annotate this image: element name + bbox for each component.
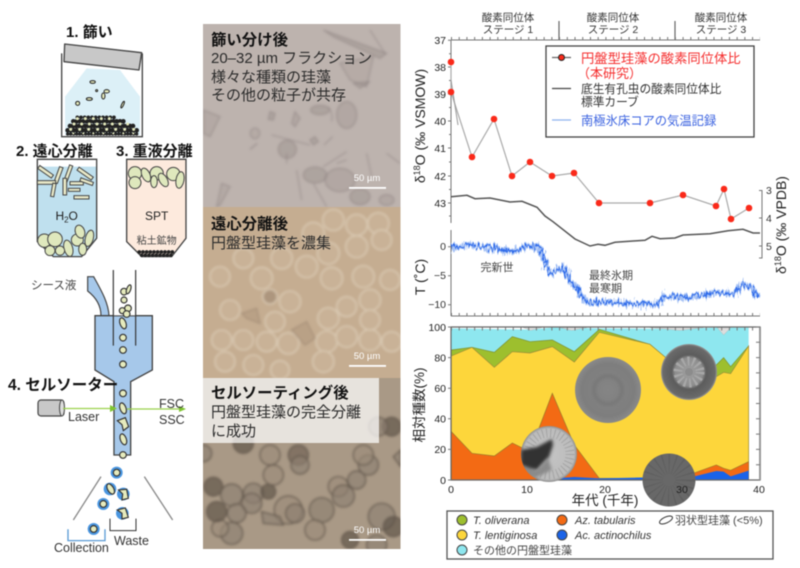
chart: relative species abundance stacked area: 0 [440, 475, 446, 487]
chart: relative species abundance stacked area [412, 322, 765, 508]
legend: species: 羽状型珪藻 (<5%) [675, 513, 763, 527]
line: benthic foraminifera stack [451, 195, 760, 246]
icon: cell sorter nozzle [88, 270, 152, 458]
legend: isotope records: 標準カーブ [581, 95, 639, 109]
legend: isotope records: （本研究） [577, 66, 642, 81]
chart: oxygen isotope stages header: ステージ 2 [588, 24, 638, 36]
icon: centrifuge tube with water: H [55, 209, 64, 223]
chart: diatom oxygen isotope and benthic curve: 43 [434, 198, 446, 210]
panel text box: after sorting: に成功 [211, 423, 256, 440]
right axis: benthic delta 18O: O (‰ VPDB) [773, 176, 789, 256]
label: sheath fluid: シース液 [31, 279, 77, 292]
chart: relative species abundance stacked area: 相対種数(%) [412, 368, 427, 442]
area: T. lentiginosa [451, 332, 749, 480]
panel text: after sieving: 様々な種類の珪藻 [211, 69, 331, 86]
icon: centrifuge tube with water [37, 159, 97, 257]
legend: species: T. oliverana [473, 515, 529, 527]
panel text box: after sorting [203, 378, 379, 443]
line: diatom oxygen isotope series [448, 59, 752, 222]
chart: relative species abundance stacked area: 60 [434, 383, 446, 395]
legend: species [447, 511, 773, 559]
chart: oxygen isotope stages header: ステージ 3 [696, 24, 746, 36]
legend: isotope records: 底生有孔虫の酸素同位体比 [581, 82, 722, 96]
chart: relative species abundance stacked area: 0 [448, 484, 454, 496]
scale bar: 50 µm: 50 µm [354, 173, 380, 184]
heading: step 2 centrifugation: 2. 遠心分離 [16, 142, 93, 160]
chart: diatom oxygen isotope and benthic curve: 18 [412, 165, 422, 175]
chart: relative species abundance stacked area: 80 [434, 352, 446, 364]
icon: centrifuge tube with SPT heavy liquid: SPT [145, 209, 169, 223]
diatom micrograph: valve with radial lines [642, 454, 696, 506]
line: temperature [451, 245, 757, 304]
legend: isotope records: 円盤型珪藻の酸素同位体比 [581, 51, 741, 66]
chart: diatom oxygen isotope and benthic curve: O (‰ VSMOW) [412, 69, 428, 165]
heading: step 1 sieving: 1. 篩い [66, 23, 113, 41]
chart: Antarctic temperature record: 最寒期 [589, 282, 622, 295]
panel text: after centrifugation [211, 214, 331, 252]
chart: Antarctic temperature record: −5 [434, 270, 446, 282]
panel text: after sieving: 篩い分け後 [211, 30, 289, 49]
diatom micrograph: centric valve 1 [575, 357, 641, 423]
chart: diatom oxygen isotope and benthic curve: 42 [434, 171, 446, 183]
chart: Antarctic temperature record: −10 [428, 299, 446, 311]
legend: species: その他の円盤型珪藻 [473, 543, 572, 557]
chart: diatom oxygen isotope and benthic curve [412, 35, 789, 274]
chart: Antarctic temperature record: 完新世 [480, 261, 514, 274]
chart: Antarctic temperature record: T (˚C) [412, 259, 428, 295]
icon: centrifuge tube with SPT heavy liquid [127, 159, 186, 257]
legend: isotope records: 南極氷床コアの気温記録 [581, 113, 717, 128]
area: other centric diatoms [451, 328, 749, 480]
icon: sieve jar [62, 44, 142, 137]
chart: relative species abundance stacked area: 40 [434, 414, 446, 426]
label: laser: Laser [68, 410, 99, 424]
chart: oxygen isotope stages header: ステージ 1 [483, 24, 533, 36]
panel: microscope photo after sorting [195, 378, 403, 555]
panel text: after centrifugation: 遠心分離後 [211, 214, 289, 233]
legend: isotope records [546, 46, 754, 137]
scale bar: 50 µm [349, 173, 386, 189]
label: FSC: FSC [159, 397, 184, 411]
chart: oxygen isotope stages header: 酸素同位体 [695, 11, 748, 24]
right axis: benthic delta 18O [759, 176, 789, 274]
panel text: after sieving [211, 30, 372, 104]
panel: microscope photo after sieving [203, 24, 401, 207]
label: waste: Waste [114, 534, 149, 548]
chart: Antarctic temperature record [412, 230, 760, 316]
icon: laser with beam arrow [38, 400, 186, 416]
icon: centrifuge tube with SPT heavy liquid: 粘土鉱物 [137, 234, 177, 247]
panel text: after sieving: 20–32 µm フラクション [211, 50, 372, 67]
icon: centrifuge tube with water: 2 [64, 216, 69, 225]
scale bar: 50 µm: 50 µm [354, 525, 380, 536]
chart: oxygen isotope stages header: 酸素同位体 [482, 11, 535, 24]
panel text box: after sorting: セルソーティング後 [211, 383, 349, 402]
right axis: benthic delta 18O: 18 [773, 256, 783, 266]
panel: sample preparation workflow [8, 23, 193, 555]
chart: relative species abundance stacked area: 20 [434, 444, 446, 456]
chart: diatom oxygen isotope and benthic curve: 38 [434, 62, 446, 74]
chart: diatom oxygen isotope and benthic curve: 41 [434, 143, 446, 155]
area: Az. tabularis [451, 393, 749, 480]
chart: relative species abundance stacked area: 100 [428, 322, 446, 334]
chart: diatom oxygen isotope and benthic curve: δ [412, 175, 428, 183]
right axis: benthic delta 18O: δ [773, 266, 789, 274]
area: pennate diatoms [523, 328, 731, 335]
right axis: benthic delta 18O: 3 [766, 185, 772, 197]
legend: species: T. lentiginosa [473, 530, 537, 542]
chart: relative species abundance stacked area: 30 [676, 484, 688, 496]
chart: oxygen isotope stages header [451, 11, 760, 40]
legend: species: Ac. actinochilus [574, 530, 652, 542]
diatom micrograph: centric valve 2 [661, 344, 717, 400]
diatom micrograph: valve with dark fragment [521, 426, 577, 482]
panel text box: after sorting: 円盤型珪藻の完全分離 [211, 404, 361, 421]
scale bar: 50 µm: 50 µm [354, 351, 380, 362]
chart: diatom oxygen isotope and benthic curve: 39 [434, 89, 446, 101]
heading: step 3 heavy liquid separation: 3. 重液分離 [116, 142, 193, 160]
chart: diatom oxygen isotope and benthic curve: 40 [434, 116, 446, 128]
panel text: after centrifugation: 円盤型珪藻を濃集 [211, 235, 331, 252]
area: Ac. actinochilus [530, 471, 749, 480]
chart: relative species abundance stacked area: 40 [753, 484, 765, 496]
scale bar: 50 µm [349, 525, 386, 541]
label: collection: Collection [54, 541, 109, 555]
legend: species: Az. tabularis [574, 515, 636, 527]
chart: Antarctic temperature record: 0 [440, 241, 446, 253]
panel text: after sieving: その他の粒子が共存 [211, 87, 346, 104]
chart: relative species abundance stacked area: 20 [599, 484, 611, 496]
chart: oxygen isotope stages header: 酸素同位体 [587, 11, 640, 24]
area: T. oliverana [451, 329, 749, 480]
right axis: benthic delta 18O: 4 [766, 213, 772, 225]
right axis: benthic delta 18O: 5 [766, 241, 772, 253]
icon: sorted droplets and collection bins [68, 467, 173, 541]
chart: relative species abundance stacked area: 年代 (千年) [572, 493, 638, 508]
chart: diatom oxygen isotope and benthic curve: 37 [434, 35, 446, 47]
chart: relative species abundance stacked area: 10 [521, 484, 533, 496]
chart: Antarctic temperature record: 最終氷期 [589, 269, 633, 282]
label: SSC: SSC [159, 413, 185, 427]
scale bar: 50 µm [349, 351, 386, 367]
icon: centrifuge tube with water: O [69, 209, 78, 223]
heading: step 4 cell sorter: 4. セルソーター [8, 376, 118, 394]
panel: microscope photo after centrifugation [203, 207, 402, 379]
